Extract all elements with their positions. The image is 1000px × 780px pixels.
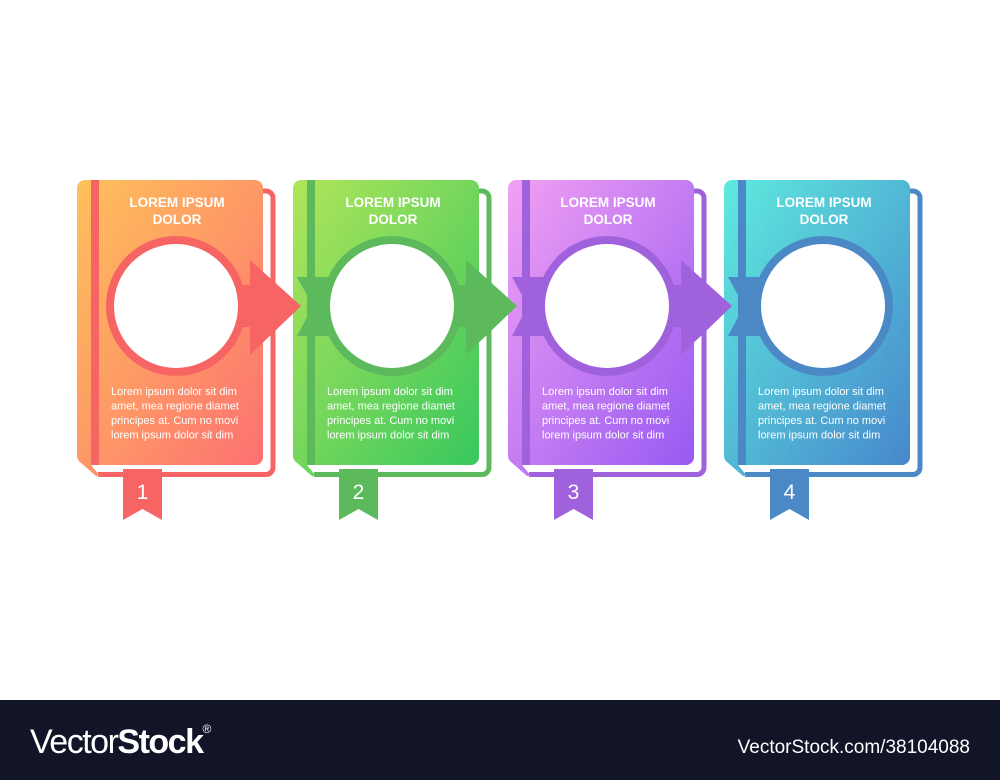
heading: LOREM IPSUM: [129, 195, 225, 210]
tail 4: [728, 277, 777, 336]
logo: VectorStock: [30, 723, 202, 761]
card 2: principes at. Cum no movi: [327, 415, 454, 427]
card 3: principes at. Cum no movi: [542, 415, 669, 427]
logo: ®: [202, 722, 211, 736]
card 3: LOREM IPSUM: [560, 195, 656, 210]
bookmark 1: [123, 469, 162, 520]
url: VectorStock.com/38104088: [738, 737, 970, 758]
card 2: Lorem ipsum dolor sit dim: [327, 386, 453, 398]
card 4: LOREM IPSUM: [776, 195, 872, 210]
arrow 3: [661, 260, 732, 355]
card 1: [77, 180, 273, 520]
back cover: [98, 191, 273, 475]
arrow 1: [230, 260, 301, 355]
card 4: DOLOR: [800, 212, 849, 227]
card 3: amet, mea regione diamet: [542, 400, 670, 412]
card 2: amet, mea regione diamet: [327, 400, 455, 412]
card 3: 3: [568, 481, 579, 504]
card 1: 1: [137, 481, 148, 504]
body text: principes at. Cum no movi: [111, 415, 238, 427]
card 2: DOLOR: [369, 212, 418, 227]
card 2: 2: [353, 481, 364, 504]
card 4: Lorem ipsum dolor sit dim: [758, 386, 884, 398]
circle holes: [114, 244, 238, 368]
card 3: lorem ipsum dolor sit dim: [542, 430, 664, 442]
card 4: principes at. Cum no movi: [758, 415, 885, 427]
card 3: [508, 180, 704, 520]
card 1: DOLOR: [153, 212, 202, 227]
footer bar: [0, 700, 1000, 780]
tail 3: [512, 277, 561, 336]
arrow 2: [446, 260, 517, 355]
card 2: lorem ipsum dolor sit dim: [327, 430, 449, 442]
card 4: [724, 180, 920, 520]
card 2: LOREM IPSUM: [345, 195, 441, 210]
card 4: lorem ipsum dolor sit dim: [758, 430, 880, 442]
connectors: tails and arrows: [114, 244, 885, 368]
card 2: [293, 180, 489, 520]
card 4: amet, mea regione diamet: [758, 400, 886, 412]
card 4: 4: [784, 481, 796, 504]
circle: [106, 236, 246, 376]
spine stripe: [91, 180, 99, 465]
body text: lorem ipsum dolor sit dim: [111, 430, 233, 442]
front cover: [77, 180, 263, 476]
tail 2: [297, 277, 346, 336]
card 3: DOLOR: [584, 212, 633, 227]
card 3: Lorem ipsum dolor sit dim: [542, 386, 668, 398]
body text: amet, mea regione diamet: [111, 400, 239, 412]
body text: Lorem ipsum dolor sit dim: [111, 386, 237, 398]
